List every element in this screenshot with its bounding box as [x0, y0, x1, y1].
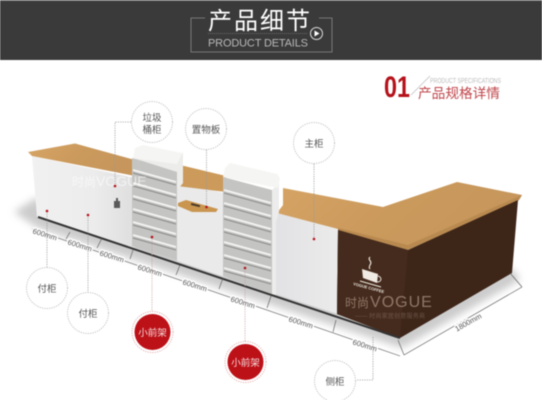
heading number: 01 — [384, 71, 410, 104]
right shelf rack — [223, 163, 280, 295]
header divider — [208, 32, 308, 34]
label 600mm: 600mm — [288, 315, 314, 330]
main wood top — [277, 182, 522, 248]
left side cabinets — [32, 156, 135, 248]
callout: 小前架 right: 小前架 — [231, 357, 260, 369]
label 1800mm: 1800mm — [453, 311, 483, 333]
icon: arrow circle — [310, 28, 322, 40]
callout: 侧柜 — [314, 337, 373, 400]
icon: coffee mug — [353, 257, 385, 294]
counter illustration — [28, 144, 522, 338]
callout: 小前架 right — [225, 267, 266, 382]
label 600mm: 600mm — [182, 278, 208, 293]
label 600mm: 600mm — [67, 238, 93, 253]
callout: 置物板: 置物板 — [192, 124, 221, 136]
label 600mm: 600mm — [99, 249, 125, 264]
callout: 付柜 right: 付柜 — [78, 308, 98, 320]
callout: 付柜 right — [68, 214, 108, 334]
label 600mm: 600mm — [137, 263, 163, 278]
left wood top — [28, 144, 135, 176]
watermark on left cabinet: 时尚VOGUE — [72, 173, 147, 189]
callout: 垃圾桶柜 — [114, 102, 172, 187]
callout: 付柜 left — [26, 210, 68, 308]
heading english: PRODUCT SPECIFICATIONS — [430, 78, 501, 85]
header frame — [191, 18, 332, 52]
heading chinese: 产品规格详情 — [418, 86, 500, 101]
icon: trash slot — [114, 198, 120, 208]
middle cabinet — [177, 182, 228, 278]
label 600mm: 600mm — [32, 227, 58, 242]
callout: 垃圾桶柜: 桶柜 — [142, 124, 162, 136]
section heading — [384, 71, 501, 104]
callout: 小前架 left — [132, 236, 173, 352]
watermark on dark cabinet: 时尚VOGUE — [345, 294, 433, 311]
callout: 主柜: 主柜 — [304, 138, 324, 150]
header title: 产品细节 — [208, 8, 310, 35]
label 600mm: 600mm — [230, 295, 256, 310]
wood tray — [178, 200, 218, 212]
callout: 付柜 left: 付柜 — [37, 283, 57, 295]
callout: 垃圾桶柜: 垃圾 — [142, 112, 162, 124]
base line — [38, 217, 400, 338]
dimension lines — [32, 229, 522, 356]
callout: 置物板 — [186, 108, 226, 208]
callout: 主柜 — [294, 122, 334, 240]
mug label: VOGUE COFFEE — [353, 281, 385, 294]
middle wood top — [177, 165, 226, 192]
side cabinet dark — [337, 200, 518, 338]
callout: 侧柜: 侧柜 — [325, 376, 345, 388]
main cabinet — [275, 212, 338, 314]
heading slash — [411, 76, 430, 95]
header subtitle: PRODUCT DETAILS — [208, 38, 308, 50]
left shelf rack — [132, 145, 183, 260]
callout: 小前架 left: 小前架 — [138, 327, 167, 339]
dimension labels — [32, 227, 483, 353]
watermark tagline: —— 时尚家居创意服务商 — [355, 312, 425, 320]
floor shadow — [14, 198, 520, 348]
header band — [0, 0, 542, 60]
label 600mm: 600mm — [352, 338, 378, 353]
